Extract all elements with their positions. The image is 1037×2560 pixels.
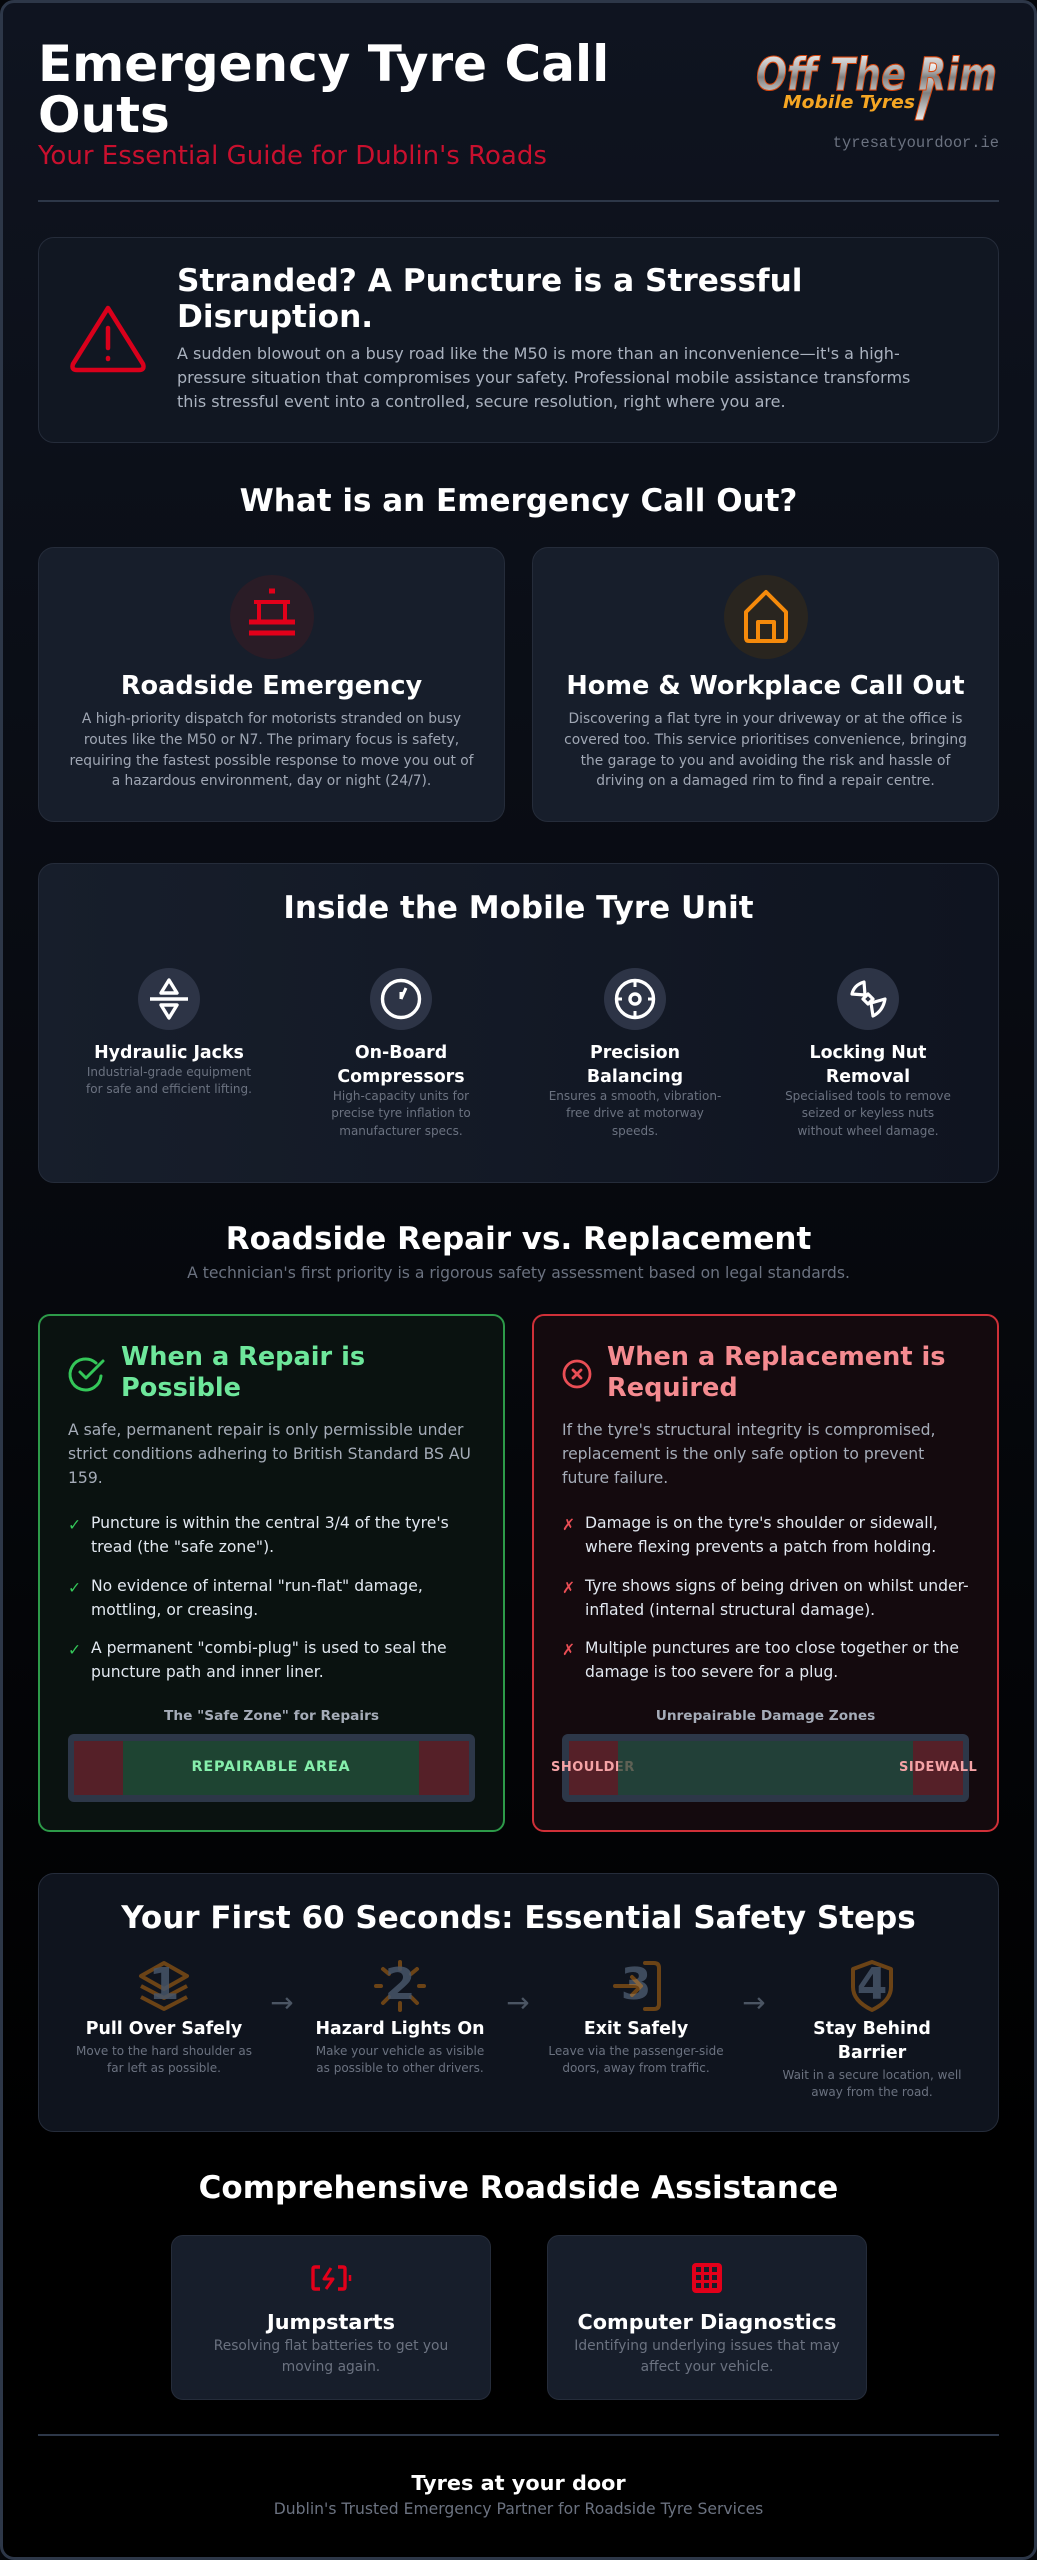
heading: comprehensive assistance: Comprehensive Roadside Assistance	[199, 2170, 838, 2206]
centre tread	[618, 1741, 913, 1795]
divider	[38, 200, 999, 202]
list item	[562, 1514, 938, 1556]
sidewall zone	[419, 1741, 469, 1795]
card text: a hazardous environment, day or night (24/7).	[112, 773, 431, 789]
sidewall zone	[913, 1741, 963, 1795]
card text: Discovering a flat tyre in your driveway or at the office is	[569, 711, 962, 727]
step title: Hazard Lights On	[316, 2019, 484, 2039]
title: Jumpstarts	[267, 2310, 395, 2334]
icon: home	[724, 575, 808, 659]
item: balancing	[549, 968, 721, 1138]
arrow: →	[270, 1986, 294, 2019]
arrow: →	[742, 1986, 766, 2019]
item text: for safe and efficient lifting.	[86, 1082, 252, 1096]
item title: Precision	[590, 1043, 680, 1063]
sidewall label: SIDEWALL	[899, 1760, 977, 1775]
item: compressors	[331, 968, 471, 1138]
sub heading: A technician's first priority is a rigorous safety assessment based on legal standards.	[187, 1264, 850, 1282]
card title: Roadside Emergency	[121, 671, 422, 701]
alert heading: Disruption.	[177, 298, 373, 334]
card text: driving on a damaged rim to find a repair centre.	[596, 773, 935, 789]
header	[38, 35, 999, 171]
step text	[516, 2043, 756, 2078]
panel: home and workplace	[532, 547, 999, 822]
item title: On-Board	[355, 1043, 447, 1063]
card text: covered too. This service prioritises convenience, bringing	[564, 732, 967, 748]
step title: Pull Over Safely	[86, 2019, 242, 2039]
item title: Locking Nut	[810, 1043, 926, 1063]
step text: far left as possible.	[107, 2061, 221, 2075]
item text: tread (the "safe zone").	[91, 1538, 274, 1556]
item text: without wheel damage.	[797, 1124, 939, 1138]
item text: No evidence of internal "run-flat" damage,	[91, 1577, 423, 1595]
item text: damage is too severe for a plug.	[585, 1663, 838, 1681]
intro: future failure.	[562, 1469, 668, 1487]
item text: A permanent "combi-plug" is used to seal the	[91, 1639, 447, 1657]
item text: where flexing prevents a patch from holding.	[585, 1538, 936, 1556]
panel: roadside emergency	[38, 547, 505, 822]
item text	[785, 1089, 951, 1138]
item text: Ensures a smooth, vibration-	[549, 1089, 721, 1103]
heading: Your First 60 Seconds: Essential Safety Steps	[121, 1900, 916, 1936]
item text: mottling, or creasing.	[91, 1601, 258, 1619]
footer title: Tyres at your door	[411, 2471, 626, 2495]
item text: free drive at motorway	[566, 1106, 704, 1120]
item text	[585, 1639, 959, 1681]
alert text: A sudden blowout on a busy road like the M50 is more than an inconvenience—it's a high-	[177, 344, 900, 363]
icon: exit door with number 3	[606, 1960, 666, 2012]
step text: Make your vehicle as visible	[316, 2044, 484, 2058]
check mark: ✓	[68, 1516, 81, 1534]
heading: Inside the Mobile Tyre Unit	[283, 890, 754, 926]
panel: diagnostics	[547, 2235, 867, 2400]
intro	[68, 1421, 471, 1487]
item title	[337, 1043, 465, 1087]
intro: 159.	[68, 1469, 103, 1487]
text: Identifying underlying issues that may	[574, 2338, 840, 2354]
item text	[91, 1577, 423, 1619]
item text: Puncture is within the central 3/4 of the tyre's	[91, 1514, 449, 1532]
icon: hazard light with number 2	[370, 1960, 430, 2012]
step 1	[76, 1959, 252, 2075]
icon: gauge	[370, 968, 432, 1030]
icon: wheel balance	[604, 968, 666, 1030]
step 3	[516, 1960, 756, 2110]
title: Possible	[121, 1372, 241, 1402]
cross mark: ✗	[562, 1516, 575, 1534]
icon: check circle	[68, 1358, 105, 1392]
title	[607, 1342, 945, 1402]
subtitle: Your Essential Guide for Dublin's Roads	[38, 141, 547, 171]
repairable area: REPAIRABLE AREA	[191, 1759, 350, 1775]
step 2	[280, 1960, 520, 2110]
item text	[331, 1089, 471, 1138]
step title: Exit Safely	[584, 2019, 688, 2039]
step text	[76, 2044, 252, 2075]
alert heading	[177, 263, 803, 334]
text: Resolving flat batteries to get you	[214, 2338, 448, 2354]
panel: repair possible	[38, 1314, 505, 1832]
zone label: Unrepairable Damage Zones	[656, 1708, 875, 1724]
shoulder zone	[74, 1741, 123, 1795]
item title: Balancing	[587, 1067, 683, 1087]
cross mark: ✗	[562, 1579, 575, 1597]
shoulder zone	[569, 1741, 618, 1795]
item text: High-capacity units for	[333, 1089, 469, 1103]
panel: replacement required	[532, 1314, 999, 1832]
heading: repair vs replacement: Roadside Repair vs. Replacement	[226, 1221, 811, 1257]
title: Emergency Tyre Call	[38, 35, 609, 93]
item title: Removal	[826, 1067, 910, 1087]
step text: doors, away from traffic.	[562, 2061, 710, 2075]
panel: first 60 seconds	[38, 1873, 999, 2132]
icon: battery	[311, 2265, 353, 2291]
icon: shield with number 4	[842, 1960, 902, 2012]
item text	[584, 1577, 969, 1619]
title	[121, 1342, 365, 1402]
title: Outs	[38, 86, 170, 144]
card text: the garage to you and avoiding the risk and hassle of	[581, 753, 950, 769]
item text: Multiple punctures are too close together or the	[585, 1639, 959, 1657]
step 4	[752, 1960, 992, 2110]
alert heading: Stranded? A Puncture is a Stressful	[177, 263, 803, 299]
tyre diagram: safe zone	[68, 1734, 475, 1802]
footer text: Dublin's Trusted Emergency Partner for Roadside Tyre Services	[274, 2500, 763, 2518]
step text: Move to the hard shoulder as	[76, 2044, 252, 2058]
step text	[752, 2067, 992, 2102]
step title: Stay Behind	[813, 2019, 931, 2039]
card text: requiring the fastest possible response to move you out of	[69, 753, 474, 769]
tyre diagram: damage zones	[562, 1734, 969, 1802]
icon: layers with number 1: 1	[149, 1959, 179, 2010]
icon: warning triangle	[70, 306, 146, 372]
text: moving again.	[282, 2359, 380, 2375]
panel: jumpstarts	[171, 2235, 491, 2400]
title: Computer Diagnostics	[577, 2310, 837, 2334]
card text	[564, 711, 967, 789]
icon: roadside	[230, 575, 314, 659]
logo: Mobile Tyres	[783, 92, 915, 113]
list item	[68, 1514, 449, 1556]
panel: mobile tyre unit	[38, 863, 999, 1183]
card text: routes like the M50 or N7. The primary focus is safety,	[84, 732, 459, 748]
repairable area	[123, 1741, 419, 1795]
title: When a Repair is	[121, 1342, 365, 1372]
step text	[280, 2043, 520, 2078]
check mark: ✓	[68, 1579, 81, 1597]
icon: exit door with number 3: 3	[621, 1959, 651, 2010]
title	[38, 35, 609, 144]
icon: jack	[138, 968, 200, 1030]
item text: Tyre shows signs of being driven on whilst under-	[585, 1577, 969, 1595]
intro: If the tyre's structural integrity is compromised,	[562, 1421, 936, 1439]
step text: as possible to other drivers.	[316, 2061, 484, 2075]
step title	[752, 2017, 992, 2066]
arrow: →	[506, 1986, 530, 2019]
item title	[810, 1043, 926, 1087]
item text: Damage is on the tyre's shoulder or sidewall,	[585, 1514, 938, 1532]
item text: Specialised tools to remove	[785, 1089, 951, 1103]
icon: hazard light with number 2: 2	[385, 1959, 415, 2010]
website: tyresatyourdoor.ie	[833, 134, 999, 152]
step title: Barrier	[838, 2043, 906, 2063]
title: When a Replacement is	[607, 1342, 945, 1372]
item text: puncture path and inner liner.	[91, 1663, 324, 1681]
step text: Wait in a secure location, well	[782, 2068, 962, 2082]
intro	[562, 1421, 936, 1487]
item title: Hydraulic Jacks	[94, 1043, 244, 1063]
text	[172, 2336, 490, 2378]
item text	[585, 1514, 938, 1556]
icon: layers with number 1	[138, 1959, 189, 2011]
shoulder label: SHOULDER	[551, 1760, 635, 1775]
list item	[68, 1639, 447, 1681]
card text: A high-priority dispatch for motorists stranded on busy	[82, 711, 461, 727]
item title: Compressors	[337, 1067, 465, 1087]
item text: manufacturer specs.	[339, 1124, 463, 1138]
item text	[91, 1639, 447, 1681]
text: affect your vehicle.	[641, 2359, 773, 2375]
list item	[68, 1577, 423, 1619]
icon: shield with number 4: 4	[857, 1959, 887, 2010]
item: locking nut	[785, 968, 951, 1138]
text	[548, 2336, 866, 2378]
intro: replacement is the only safe option to prevent	[562, 1445, 924, 1463]
card title: Home & Workplace Call Out	[566, 671, 965, 701]
item: hydraulic jacks	[86, 968, 252, 1096]
item text	[91, 1514, 449, 1556]
panel: alert	[38, 237, 999, 443]
item text: precise tyre inflation to	[331, 1106, 471, 1120]
footer	[38, 2466, 999, 2522]
alert text	[177, 344, 910, 411]
cross mark: ✗	[562, 1641, 575, 1659]
zone label: The "Safe Zone" for Repairs	[164, 1708, 379, 1724]
intro: strict conditions adhering to British Standard BS AU	[68, 1445, 471, 1463]
item text: seized or keyless nuts	[802, 1106, 934, 1120]
alert text: pressure situation that compromises your safety. Professional mobile assistance transforms	[177, 368, 910, 387]
icon: locking nut	[837, 968, 899, 1030]
item text	[549, 1089, 721, 1138]
icon: x circle	[562, 1360, 592, 1388]
step text: away from the road.	[811, 2085, 933, 2099]
item title	[587, 1043, 683, 1087]
item text	[86, 1065, 252, 1096]
step text: Leave via the passenger-side	[548, 2044, 724, 2058]
item text: Industrial-grade equipment	[87, 1065, 251, 1079]
card text	[69, 711, 474, 789]
intro: A safe, permanent repair is only permissible under	[68, 1421, 463, 1439]
item text: speeds.	[612, 1124, 658, 1138]
divider	[38, 2434, 999, 2436]
list item	[562, 1639, 959, 1681]
check mark: ✓	[68, 1641, 81, 1659]
item text: inflated (internal structural damage).	[585, 1601, 875, 1619]
title: Required	[607, 1372, 738, 1402]
heading: what is: What is an Emergency Call Out?	[240, 483, 797, 519]
alert text: this stressful event into a controlled, secure resolution, right where you are.	[177, 392, 786, 411]
icon: chip grid	[691, 2262, 723, 2294]
list item	[562, 1577, 969, 1619]
logo	[756, 48, 997, 120]
